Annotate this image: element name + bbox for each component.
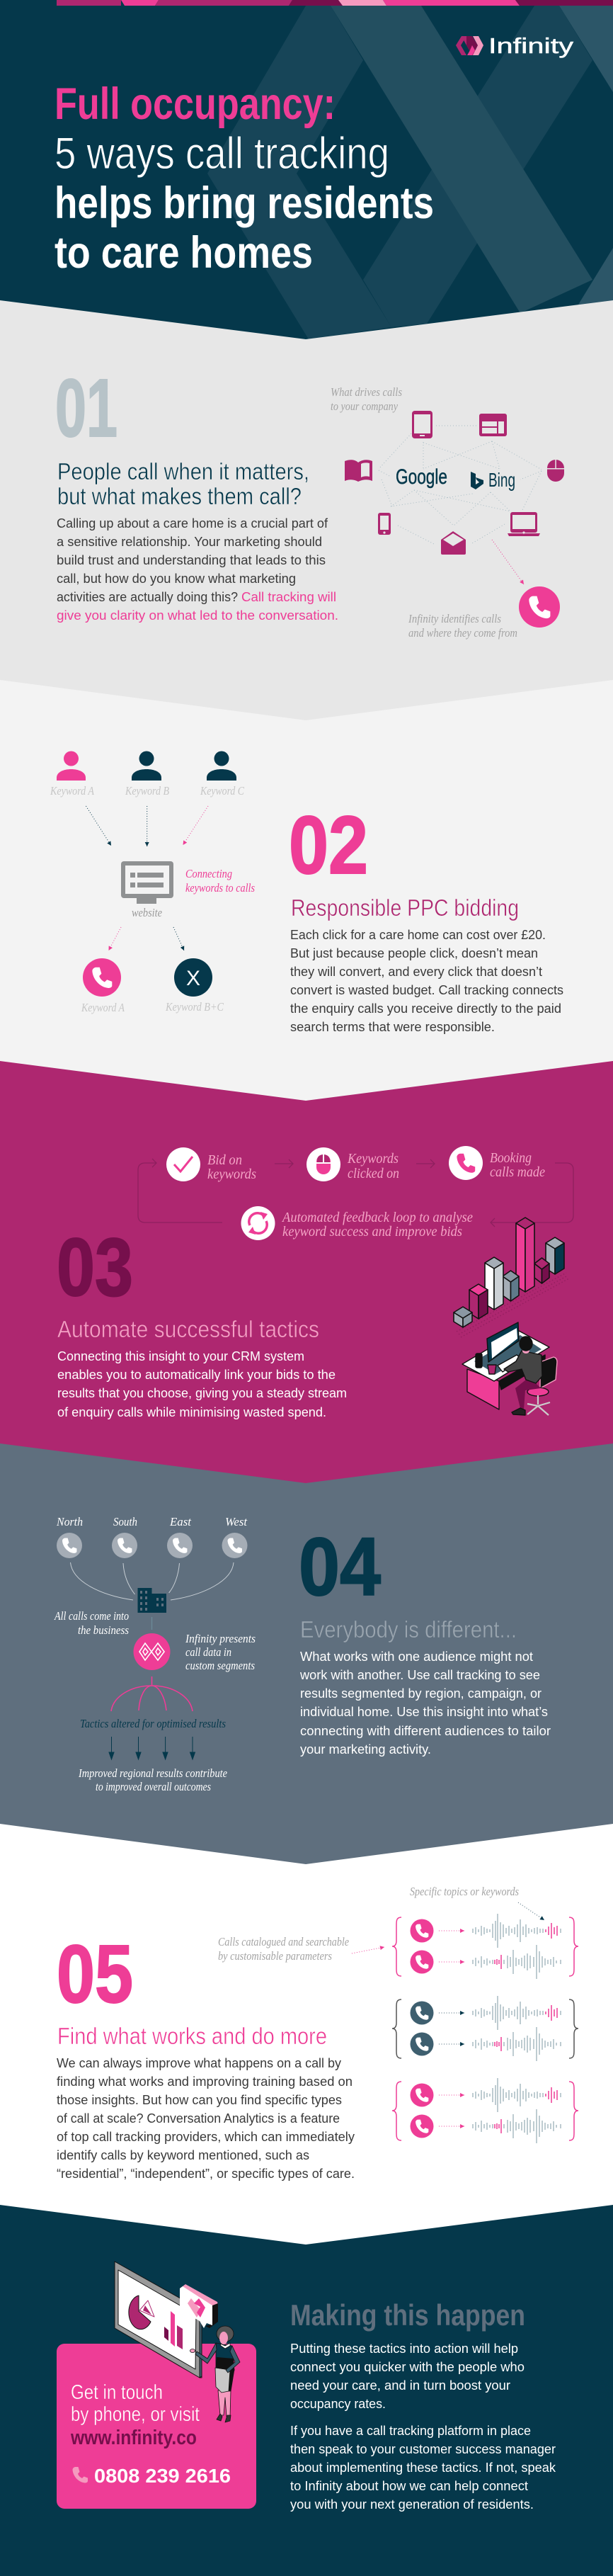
icon: call circle — [83, 958, 121, 997]
body text: connecting with different audiences to tailor — [300, 1724, 551, 1738]
annotation: calls catalogued — [218, 1935, 349, 1963]
title: helps bring residents — [55, 178, 434, 228]
number 03: 03 — [57, 1221, 133, 1313]
flow: feedback loop — [138, 1146, 573, 1240]
body text: of enquiry calls while minimising wasted spend. — [57, 1405, 326, 1419]
panel: section 3 background — [0, 1061, 613, 1558]
panel: section 5 background — [0, 1824, 613, 2266]
panel: section 2 content — [50, 751, 563, 1034]
group 3: pink calls — [392, 2078, 578, 2143]
body text: your marketing activity. — [300, 1742, 431, 1757]
keyword labels: Keyword B — [125, 784, 170, 798]
keyword labels: Keyword A — [50, 784, 94, 798]
title — [55, 79, 434, 278]
flow labels: keyword success and improve bids — [282, 1224, 462, 1239]
body text: those insights. But how can you find specific types — [57, 2093, 342, 2107]
body text: Call tracking will — [241, 590, 336, 604]
flow labels: clicked on — [348, 1166, 399, 1181]
body text: a sensitive relationship. Your marketing should — [57, 535, 322, 549]
pink branching arcs — [111, 1676, 193, 1711]
contact text: www.infinity.co — [70, 2427, 197, 2449]
illustration: presenter — [190, 2326, 240, 2422]
result labels — [81, 1000, 224, 1014]
body text: individual home. Use this insight into what’s — [300, 1705, 548, 1719]
region labels: East — [169, 1515, 192, 1528]
body text: results that you choose, giving you a steady stream — [57, 1386, 347, 1400]
flow labels: keywords — [207, 1167, 256, 1182]
icon: small phone — [378, 513, 391, 535]
body text: connect you quicker with the people who — [290, 2360, 525, 2374]
body text: build trust and understanding that leads to this — [57, 553, 326, 567]
annotation: connecting keywords: keywords to calls — [185, 881, 255, 895]
icon: person B — [132, 751, 161, 781]
annotation: infinity identifies: and where they come from — [408, 626, 517, 640]
result labels: Keyword A — [81, 1001, 125, 1014]
flow labels: Automated feedback loop to analyse — [281, 1210, 473, 1225]
annotation: infinity presents: custom segments — [185, 1659, 255, 1672]
arrows to website — [86, 806, 208, 846]
heading: making this happen: Making this happen — [290, 2298, 525, 2332]
top colour strip — [57, 0, 613, 6]
body text: “residential”, “independent”, or specific types of care. — [57, 2167, 355, 2181]
body text: to Infinity about how we can help connect — [290, 2479, 528, 2493]
body text — [290, 928, 563, 1034]
body text — [57, 2056, 355, 2181]
icon: refresh — [241, 1206, 275, 1240]
diagram: regional segments — [54, 1515, 256, 1793]
annotation: infinity presents: Infinity presents — [185, 1632, 256, 1645]
group 1: pink calls — [392, 1914, 578, 1979]
body text — [299, 1650, 551, 1757]
annotation: infinity presents — [185, 1632, 256, 1672]
body text: What works with one audience might not — [300, 1650, 533, 1664]
flow labels — [207, 1150, 545, 1239]
body text: Calling up about a care home is a crucial part of — [57, 516, 328, 530]
annotation: infinity presents: call data in — [185, 1645, 231, 1659]
body text: identify calls by keyword mentioned, such as — [57, 2148, 309, 2162]
number 05: 05 — [57, 1928, 133, 2020]
annotation: calls catalogued: by customisable parameters — [218, 1949, 332, 1963]
icon: person A — [57, 751, 86, 781]
body text: activities are actually doing this? — [57, 590, 238, 604]
heading: People call when it matters, — [57, 458, 309, 484]
body text: Each click for a care home can cost over £20. — [290, 928, 546, 942]
body text: then speak to your customer success manager — [290, 2442, 556, 2456]
body text: Putting these tactics into action will help — [290, 2342, 518, 2356]
logo: Infinity — [456, 33, 574, 58]
annotation: specific topics: Specific topics or keywords — [410, 1885, 519, 1898]
group 2: teal calls — [392, 1996, 578, 2061]
annotation: what drives calls — [331, 385, 402, 413]
body text: you with your next generation of residents. — [290, 2497, 534, 2512]
icon: X circle: X — [186, 967, 200, 990]
panel: section 3 content — [57, 1146, 573, 1419]
arrow: to call — [492, 540, 524, 584]
icon: laptop — [508, 512, 540, 536]
annotation: improved results — [78, 1766, 227, 1793]
annotation: infinity identifies — [408, 612, 517, 640]
icon: X circle — [174, 958, 212, 997]
illustration: person at desk — [462, 1322, 557, 1415]
illustration: speech bubble — [180, 2284, 218, 2328]
label: website: website — [132, 906, 162, 919]
contact text — [70, 2381, 200, 2449]
icon: envelope — [441, 531, 466, 555]
chart: network of call sources — [331, 385, 564, 640]
annotation: tactics altered: Tactics altered for optimised results — [80, 1717, 226, 1730]
body text: they will convert, and every click that doesn’t — [290, 965, 542, 979]
body text — [57, 516, 338, 623]
phone number: 0808 239 2616 — [94, 2465, 231, 2487]
flow labels: Booking — [490, 1150, 532, 1166]
flow labels: calls made — [490, 1164, 545, 1180]
title: Full occupancy: — [55, 79, 336, 129]
icon: person C — [207, 751, 236, 781]
panel: section 6 background — [0, 2205, 613, 2576]
heading: Automate successful tactics — [57, 1316, 319, 1342]
contact text: Get in touch — [71, 2381, 163, 2404]
panel: section 6 content — [57, 2262, 556, 2512]
body text: occupancy rates. — [290, 2397, 386, 2411]
body text: But just because people click, doesn’t mean — [290, 946, 538, 960]
arrows down — [109, 1737, 195, 1759]
heading — [57, 458, 309, 509]
panel: section 5 content — [57, 1885, 578, 2181]
body text: give you clarity on what led to the conversation. — [57, 608, 338, 623]
annotation: all calls: the business — [78, 1623, 129, 1637]
logo: Infinity: Infinity — [488, 33, 574, 58]
title: 5 ways call tracking — [55, 129, 389, 178]
heading: Responsible PPC bidding — [291, 895, 519, 921]
panel: section 4 content — [54, 1515, 551, 1793]
annotation: connecting keywords: Connecting — [185, 867, 232, 880]
heading: but what makes them call? — [57, 483, 302, 509]
body text: We can always improve what happens on a call by — [57, 2056, 341, 2070]
card: get in touch — [57, 2344, 256, 2509]
icon: infinity circle — [133, 1633, 170, 1670]
panel: section 4 background — [0, 1443, 613, 1912]
number 02: 02 — [289, 799, 368, 891]
body text: Connecting this insight to your CRM system — [57, 1349, 304, 1363]
icon: mouse — [306, 1147, 340, 1181]
arrow: specific topics — [518, 1902, 544, 1920]
body text: work with another. Use call tracking to see — [299, 1668, 540, 1682]
logo: Google: Google — [396, 465, 447, 489]
body text: results segmented by region, campaign, or — [300, 1686, 542, 1701]
keyword labels — [50, 784, 245, 798]
body text: of top call tracking providers, which can immediately — [57, 2130, 355, 2144]
heading: Find what works and do more — [57, 2023, 327, 2049]
body text: the enquiry calls you receive directly to the paid — [290, 1002, 561, 1016]
chart: isometric columns — [454, 1218, 569, 1337]
heading: Everybody is different... — [300, 1616, 517, 1642]
number 01: 01 — [55, 362, 118, 454]
flow labels: Bid on — [207, 1152, 242, 1168]
body text: convert is wasted budget. Call tracking connects — [290, 983, 563, 997]
panel: hero — [0, 0, 613, 340]
arrows: loop connectors — [138, 1159, 573, 1227]
icon: building — [137, 1588, 166, 1613]
annotation: infinity identifies: Infinity identifies calls — [408, 612, 501, 625]
icon: call circle — [519, 586, 560, 628]
title: to care homes — [55, 228, 313, 278]
annotation: all calls: All calls come into — [54, 1609, 129, 1623]
keyword labels: Keyword C — [200, 784, 245, 798]
body text: about implementing these tactics. If not, speak — [290, 2461, 556, 2475]
annotation: improved results: to improved overall outcomes — [96, 1780, 211, 1793]
icon: mouse — [547, 460, 564, 482]
icon: smartphone — [412, 411, 432, 438]
diagram: keywords to calls — [50, 751, 255, 1014]
panel: section 1 content — [55, 362, 564, 640]
region labels: South — [113, 1515, 137, 1528]
body text — [290, 2342, 556, 2512]
annotation: connecting keywords — [185, 867, 255, 895]
icon: book — [345, 460, 372, 482]
annotation: what drives calls: to your company — [331, 399, 398, 413]
contact text: by phone, or visit — [71, 2403, 200, 2426]
region labels: West — [225, 1515, 248, 1528]
icon: web page — [479, 414, 507, 436]
logo: Bing: Bing — [488, 469, 515, 491]
icon: tick — [166, 1147, 200, 1181]
arrow: calls catalogued — [352, 1947, 384, 1953]
body text: enables you to automatically link your bids to the — [57, 1368, 336, 1382]
icon: phone — [72, 2467, 88, 2483]
annotation: improved results: Improved regional results contribute — [78, 1766, 227, 1780]
body text: search terms that were responsible. — [290, 1020, 495, 1034]
number 04: 04 — [299, 1521, 381, 1613]
body text — [57, 1349, 347, 1419]
region labels: North — [56, 1515, 83, 1528]
icons: region phones — [57, 1533, 248, 1558]
arrows from website — [109, 927, 184, 951]
body text: of call at scale? Conversation Analytics is a feature — [57, 2111, 340, 2126]
annotation: all calls — [54, 1609, 129, 1637]
illustration: presentation board — [115, 2262, 202, 2378]
body text: If you have a call tracking platform in place — [290, 2424, 531, 2438]
icon: phone — [449, 1146, 483, 1180]
panel: section 2 background — [0, 680, 613, 1133]
body text: finding what works and improving training based on — [57, 2075, 353, 2089]
curves into business — [71, 1562, 234, 1600]
logo: Bing — [471, 469, 515, 491]
result labels: Keyword B+C — [165, 1000, 224, 1014]
annotation: what drives calls: What drives calls — [331, 385, 402, 399]
panel: section 1 background — [0, 300, 613, 779]
icon: website monitor — [121, 861, 173, 904]
flow labels: Keywords — [347, 1151, 399, 1167]
body text: call, but how do you know what marketing — [57, 572, 296, 586]
body text: need your care, and in turn boost your — [290, 2378, 510, 2393]
annotation: calls catalogued: Calls catalogued and searchable — [218, 1935, 349, 1948]
region labels — [56, 1515, 248, 1528]
